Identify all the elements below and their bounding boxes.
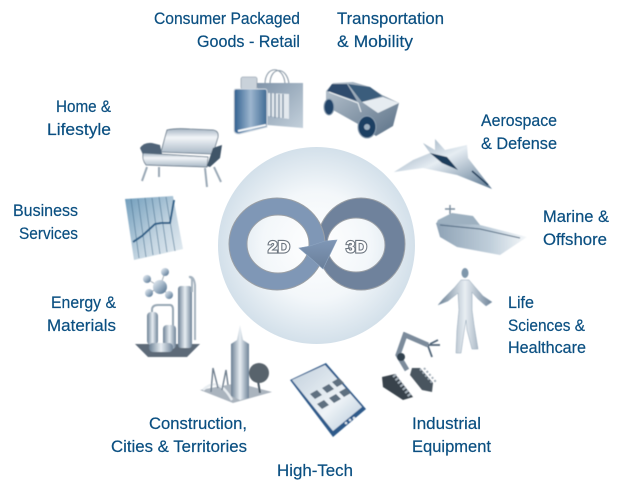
arrow head bbox=[299, 240, 337, 269]
label: Business Services: Business bbox=[13, 201, 78, 220]
label: Transportation & Mobility bbox=[337, 9, 444, 51]
label: Life Sciences & Healthcare: Healthcare bbox=[508, 338, 586, 357]
label: Aerospace & Defense: & Defense bbox=[481, 134, 557, 153]
infinity loop 2D to 3D bbox=[229, 198, 405, 290]
icon: robot on tracks bbox=[382, 335, 440, 400]
label: Life Sciences & Healthcare bbox=[508, 293, 586, 357]
icon: tablet bbox=[290, 363, 366, 437]
icon: perfume bottle and shopping bag bbox=[234, 70, 303, 134]
label: Transportation & Mobility: Transportation bbox=[337, 9, 444, 28]
label: Aerospace & Defense bbox=[481, 111, 557, 153]
label: Consumer Packaged Goods - Retail bbox=[154, 9, 300, 51]
label: Industrial Equipment bbox=[412, 414, 491, 456]
left ring: 2D bbox=[229, 198, 325, 290]
icon: energy plant and molecule bbox=[135, 268, 200, 357]
label: 3D: 3D bbox=[346, 238, 367, 256]
icon: yacht bbox=[436, 205, 527, 255]
icon: car bbox=[324, 82, 399, 138]
label: Home & Lifestyle: Lifestyle bbox=[47, 120, 111, 139]
label: Construction, Cities & Territories bbox=[111, 414, 247, 456]
icon: jet bbox=[394, 139, 492, 189]
label: Marine & Offshore: Marine & bbox=[543, 207, 610, 226]
label: Energy & Materials bbox=[47, 293, 117, 335]
central sphere bbox=[218, 147, 415, 344]
label: Home & Lifestyle bbox=[47, 97, 112, 139]
label: Energy & Materials: Energy & bbox=[51, 293, 117, 312]
label: Aerospace & Defense: Aerospace bbox=[481, 111, 557, 130]
label: Marine & Offshore bbox=[543, 207, 610, 249]
icon: business chart bbox=[125, 196, 183, 260]
label: Business Services: Services bbox=[19, 224, 78, 243]
label: Construction, Cities & Territories: Construction, bbox=[149, 414, 247, 433]
label: Transportation & Mobility: & Mobility bbox=[337, 32, 414, 51]
label: Home & Lifestyle: Home & bbox=[56, 97, 112, 116]
label: High-Tech: High-Tech bbox=[277, 461, 353, 480]
icon: sofa bbox=[140, 129, 222, 187]
icon: human figure bbox=[438, 268, 492, 353]
label: 2D: 2D bbox=[268, 238, 290, 256]
label: Industrial Equipment: Industrial bbox=[412, 414, 481, 433]
icon: city tower bridge and tree bbox=[200, 325, 272, 403]
label: Life Sciences & Healthcare: Life bbox=[508, 293, 534, 312]
label: Marine & Offshore: Offshore bbox=[543, 230, 607, 249]
right ring: 3D bbox=[317, 198, 405, 290]
label: Industrial Equipment: Equipment bbox=[412, 437, 491, 456]
label: Consumer Packaged Goods - Retail: Consumer Packaged bbox=[154, 9, 300, 28]
label: Life Sciences & Healthcare: Sciences & bbox=[508, 316, 586, 335]
label: Consumer Packaged Goods - Retail: Goods - Retail bbox=[197, 32, 300, 51]
label: Construction, Cities & Territories: Cities & Territories bbox=[111, 437, 247, 456]
label: Energy & Materials: Materials bbox=[47, 316, 116, 335]
label: Business Services bbox=[13, 201, 78, 243]
